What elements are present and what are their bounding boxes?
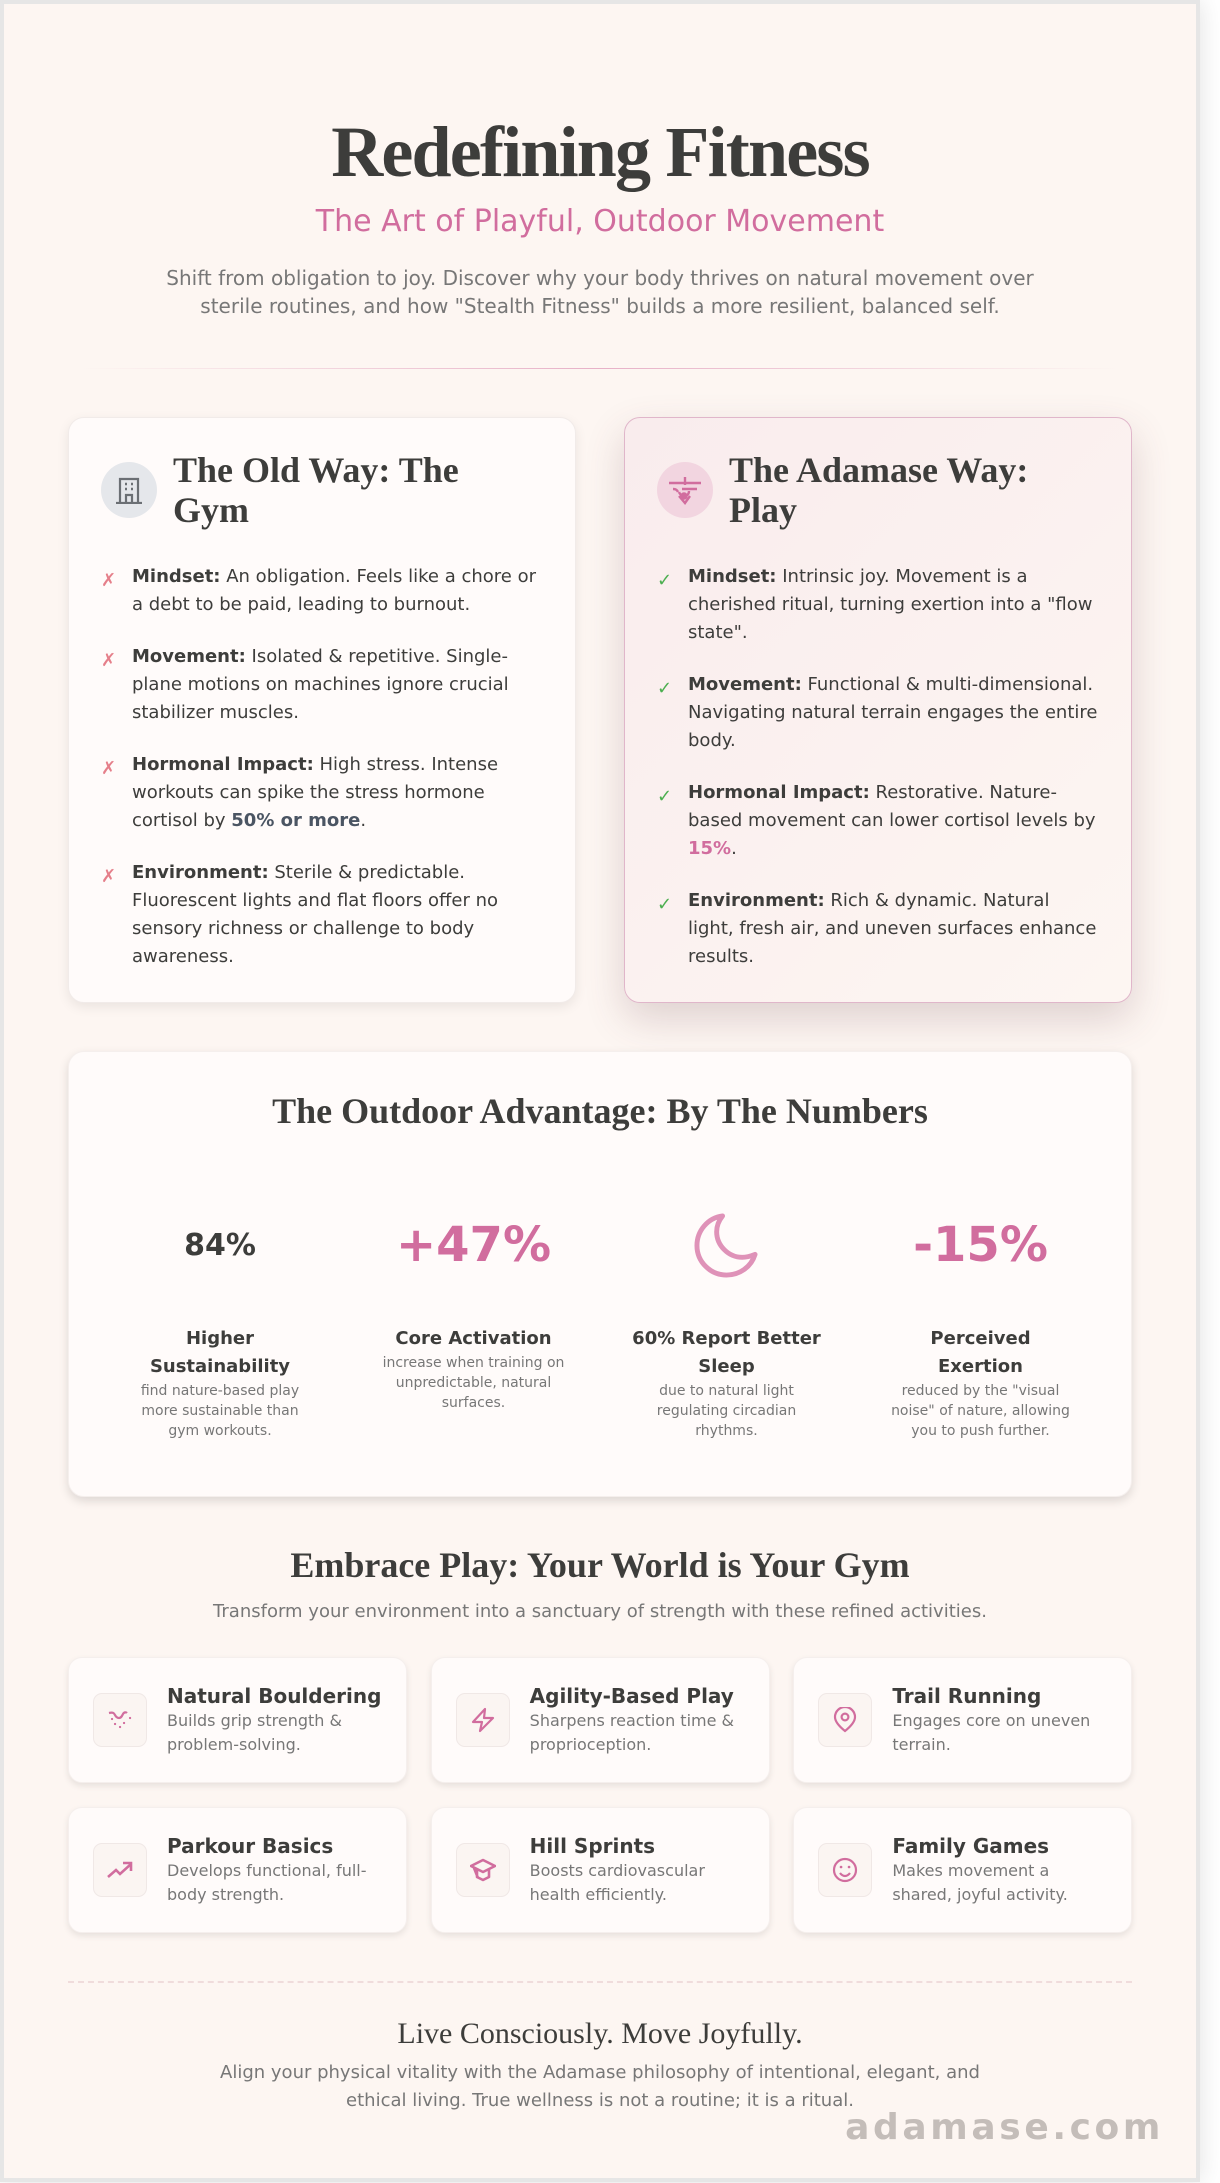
description: due to natural light	[659, 1383, 794, 1399]
item: hormonal impact: 15%.	[688, 838, 737, 859]
description: rhythms.	[695, 1423, 758, 1439]
item: environment: awareness.	[132, 946, 234, 967]
item: environment: Environment: Sterile & predictable.	[132, 862, 465, 883]
description	[892, 1861, 1068, 1904]
title: Family Games	[892, 1834, 1049, 1858]
label: Perceived	[930, 1328, 1031, 1349]
card: trail running	[793, 1657, 1132, 1783]
heading: by the numbers: The Outdoor Advantage: By The Numbers	[272, 1091, 928, 1131]
number: 84%	[184, 1228, 256, 1263]
description	[530, 1861, 705, 1904]
description: unpredictable, natural	[396, 1375, 551, 1391]
panel: the adamase way	[624, 417, 1132, 1003]
item: movement: stabilizer muscles.	[132, 702, 299, 723]
heading: the old way: Gym	[173, 490, 249, 530]
description: health efficiently.	[530, 1885, 667, 1904]
title: Agility-Based Play	[530, 1684, 734, 1708]
item: mindset: ✗	[101, 570, 116, 591]
stat: +47%	[383, 1217, 564, 1411]
icon: moon	[694, 1214, 758, 1278]
label: Sustainability	[150, 1356, 290, 1377]
description: Builds grip strength &	[167, 1711, 342, 1730]
description: Boosts cardiovascular	[530, 1861, 705, 1880]
item: environment: ✓	[657, 894, 672, 915]
item: hormonal impact: based movement can lower cortisol levels by	[688, 810, 1096, 831]
item: mindset: state".	[688, 622, 748, 643]
description: Develops functional, full-	[167, 1861, 367, 1880]
heading: the adamase way: Play	[729, 490, 797, 530]
title: Natural Bouldering	[167, 1684, 381, 1708]
description: shared, joyful activity.	[892, 1885, 1068, 1904]
item: environment: Environment: Rich & dynamic. Natural	[688, 890, 1049, 911]
footer text: Align your physical vitality with the Adamase philosophy of intentional, elegant, and	[220, 2062, 980, 2083]
description: noise" of nature, allowing	[891, 1403, 1070, 1419]
item: mindset	[101, 566, 536, 615]
description: surfaces.	[442, 1395, 505, 1411]
watermark: adamase.com	[845, 2107, 1164, 2148]
heading: the old way	[173, 450, 459, 530]
item: environment	[101, 862, 498, 967]
description: terrain.	[892, 1735, 951, 1754]
description	[141, 1383, 299, 1439]
item: environment: results.	[688, 946, 754, 967]
item: movement: Movement: Isolated & repetitive. Single-	[132, 646, 508, 667]
panel: the old way	[68, 417, 576, 1003]
item: hormonal impact: ✓	[657, 786, 672, 807]
intro text: Shift from obligation to joy. Discover why your body thrives on natural movement over	[166, 266, 1034, 290]
footer text: ethical living. True wellness is not a routine; it is a ritual.	[346, 2090, 854, 2111]
card: agility-based play	[431, 1657, 770, 1783]
stat: better sleep	[632, 1214, 821, 1439]
icon: building	[101, 462, 157, 518]
item: hormonal impact: Hormonal Impact: Restorative. Nature-	[688, 782, 1057, 803]
description: you to push further.	[911, 1423, 1050, 1439]
subtitle: The Art of Playful, Outdoor Movement	[316, 204, 884, 239]
item: hormonal impact: Hormonal Impact: High stress. Intense	[132, 754, 498, 775]
item: mindset: a debt to be paid, leading to burnout.	[132, 594, 470, 615]
description: increase when training on	[383, 1355, 564, 1371]
item: mindset: Mindset: An obligation. Feels like a chore or	[132, 566, 536, 587]
description: Makes movement a	[892, 1861, 1049, 1880]
description: reduced by the "visual	[902, 1383, 1059, 1399]
item: movement: body.	[688, 730, 736, 751]
description	[383, 1355, 564, 1411]
item: mindset: ✓	[657, 570, 672, 591]
item: environment: ✗	[101, 866, 116, 887]
icon: trending up	[93, 1843, 147, 1897]
label: Higher	[186, 1328, 254, 1349]
description	[657, 1383, 796, 1439]
item: mindset: Mindset: Intrinsic joy. Movement is a	[688, 566, 1028, 587]
description: gym workouts.	[168, 1423, 272, 1439]
item: hormonal impact: cortisol by 50% or more.	[132, 810, 366, 831]
stat: -15%	[891, 1217, 1070, 1439]
card: hill sprints	[431, 1807, 770, 1933]
card: family games	[793, 1807, 1132, 1933]
icon: adamase play	[657, 462, 713, 518]
description: proprioception.	[530, 1735, 651, 1754]
number: +47%	[396, 1217, 551, 1273]
footer heading: Live Consciously. Move Joyfully.	[397, 2017, 803, 2050]
description: problem-solving.	[167, 1735, 301, 1754]
item: movement	[101, 646, 509, 723]
heading: embrace play: Embrace Play: Your World is Your Gym	[290, 1545, 910, 1585]
footer text	[220, 2062, 980, 2111]
item: hormonal impact: workouts can spike the stress hormone	[132, 782, 485, 803]
description	[167, 1861, 367, 1904]
icon: map pin	[818, 1693, 872, 1747]
heading: the adamase way: The Adamase Way:	[729, 450, 1028, 490]
icon: lightning	[456, 1693, 510, 1747]
item: movement: Movement: Functional & multi-dimensional.	[688, 674, 1093, 695]
description: find nature-based play	[141, 1383, 299, 1399]
item: environment: light, fresh air, and uneven surfaces enhance	[688, 918, 1096, 939]
heading: the old way: The Old Way: The	[173, 450, 459, 490]
heading: the adamase way	[729, 450, 1028, 530]
item: environment: Fluorescent lights and flat floors offer no	[132, 890, 498, 911]
description	[891, 1383, 1070, 1439]
description: Sharpens reaction time &	[530, 1711, 734, 1730]
card: natural bouldering	[68, 1657, 407, 1783]
item: movement: plane motions on machines ignore crucial	[132, 674, 509, 695]
item: movement: ✗	[101, 650, 116, 671]
item: hormonal impact	[657, 782, 1096, 859]
icon: graduation cap	[456, 1843, 510, 1897]
item: hormonal impact: ✗	[101, 758, 116, 779]
description	[892, 1711, 1090, 1754]
item: movement	[657, 674, 1097, 751]
description	[167, 1711, 342, 1754]
label	[930, 1328, 1031, 1377]
item: mindset	[657, 566, 1092, 643]
description: body strength.	[167, 1885, 284, 1904]
description: Engages core on uneven	[892, 1711, 1090, 1730]
description	[530, 1711, 734, 1754]
title: Parkour Basics	[167, 1834, 333, 1858]
description: more sustainable than	[141, 1403, 299, 1419]
card: parkour basics	[68, 1807, 407, 1933]
label	[632, 1328, 821, 1377]
label	[150, 1328, 290, 1377]
section subtitle: Transform your environment into a sanctuary of strength with these refined activities.	[213, 1601, 987, 1622]
panel: by the numbers	[68, 1051, 1132, 1497]
title: Hill Sprints	[530, 1834, 655, 1858]
intro text: sterile routines, and how "Stealth Fitness" builds a more resilient, balanced self.	[200, 294, 1000, 318]
title: Redefining Fitness	[331, 112, 869, 192]
item: environment	[657, 890, 1096, 967]
label: Core Activation	[395, 1328, 552, 1349]
label: Exertion	[938, 1356, 1023, 1377]
item: movement: ✓	[657, 678, 672, 699]
item: movement: Navigating natural terrain engages the entire	[688, 702, 1097, 723]
icon: bouldering	[93, 1693, 147, 1747]
item: mindset: cherished ritual, turning exertion into a "flow	[688, 594, 1092, 615]
title: Trail Running	[892, 1684, 1041, 1708]
label: Sleep	[698, 1356, 755, 1377]
item: environment: sensory richness or challenge to body	[132, 918, 474, 939]
number: -15%	[913, 1217, 1048, 1273]
description: regulating circadian	[657, 1403, 796, 1419]
item: hormonal impact	[101, 754, 498, 831]
stat: 84%	[141, 1228, 299, 1439]
label: 60% Report Better	[632, 1328, 821, 1349]
icon: smile	[818, 1843, 872, 1897]
intro text	[166, 266, 1034, 318]
